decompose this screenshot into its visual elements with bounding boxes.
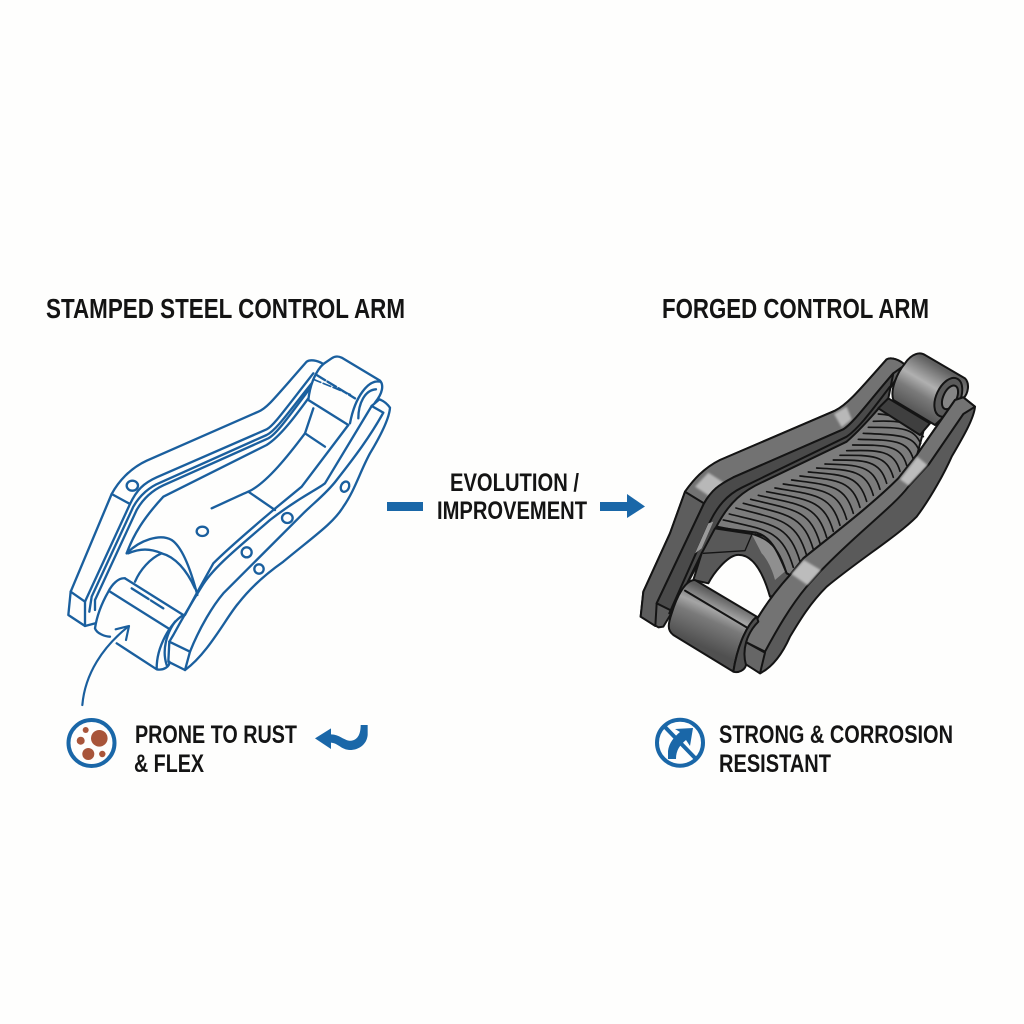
text: prone to rust and flex: & FLEX — [134, 750, 204, 778]
callout arrow: to stamped arm bushing — [82, 626, 129, 705]
arrow: evolution arrowhead — [600, 494, 645, 518]
label: evolution / improvement: IMPROVEMENT — [437, 497, 587, 525]
back flange — [641, 358, 905, 627]
heading: stamped steel control arm: STAMPED STEEL CONTROL ARM — [46, 293, 405, 324]
rivet holes — [127, 480, 351, 574]
forged web with grain flow lines — [716, 405, 923, 577]
arrow: evolution dash — [387, 502, 423, 511]
text: strong and corrosion resistant: RESISTANT — [719, 750, 831, 778]
text: strong and corrosion resistant — [719, 721, 953, 778]
text: prone to rust and flex — [134, 721, 297, 778]
label: evolution / improvement: EVOLUTION / — [450, 469, 579, 497]
lower web arch — [693, 528, 803, 597]
front flange — [168, 399, 390, 670]
web detail lines — [127, 408, 325, 595]
front flange — [740, 397, 975, 673]
label: evolution / improvement — [437, 469, 587, 525]
back flange — [68, 360, 323, 626]
icon: curved return arrow — [315, 725, 368, 750]
icon: rust spots — [68, 720, 114, 766]
front bushing — [95, 578, 183, 670]
icon: no corrosion arrow — [657, 720, 703, 766]
text: prone to rust and flex: PRONE TO RUST — [135, 721, 297, 749]
heading: forged control arm: FORGED CONTROL ARM — [662, 293, 929, 324]
text: strong and corrosion resistant: STRONG & CORROSION — [719, 721, 953, 749]
front bushing — [669, 580, 758, 672]
rear bushing — [308, 356, 382, 425]
rear bushing — [878, 353, 968, 435]
illustration: forged arm — [641, 353, 975, 673]
illustration: stamped steel arm blueprint — [68, 356, 390, 670]
